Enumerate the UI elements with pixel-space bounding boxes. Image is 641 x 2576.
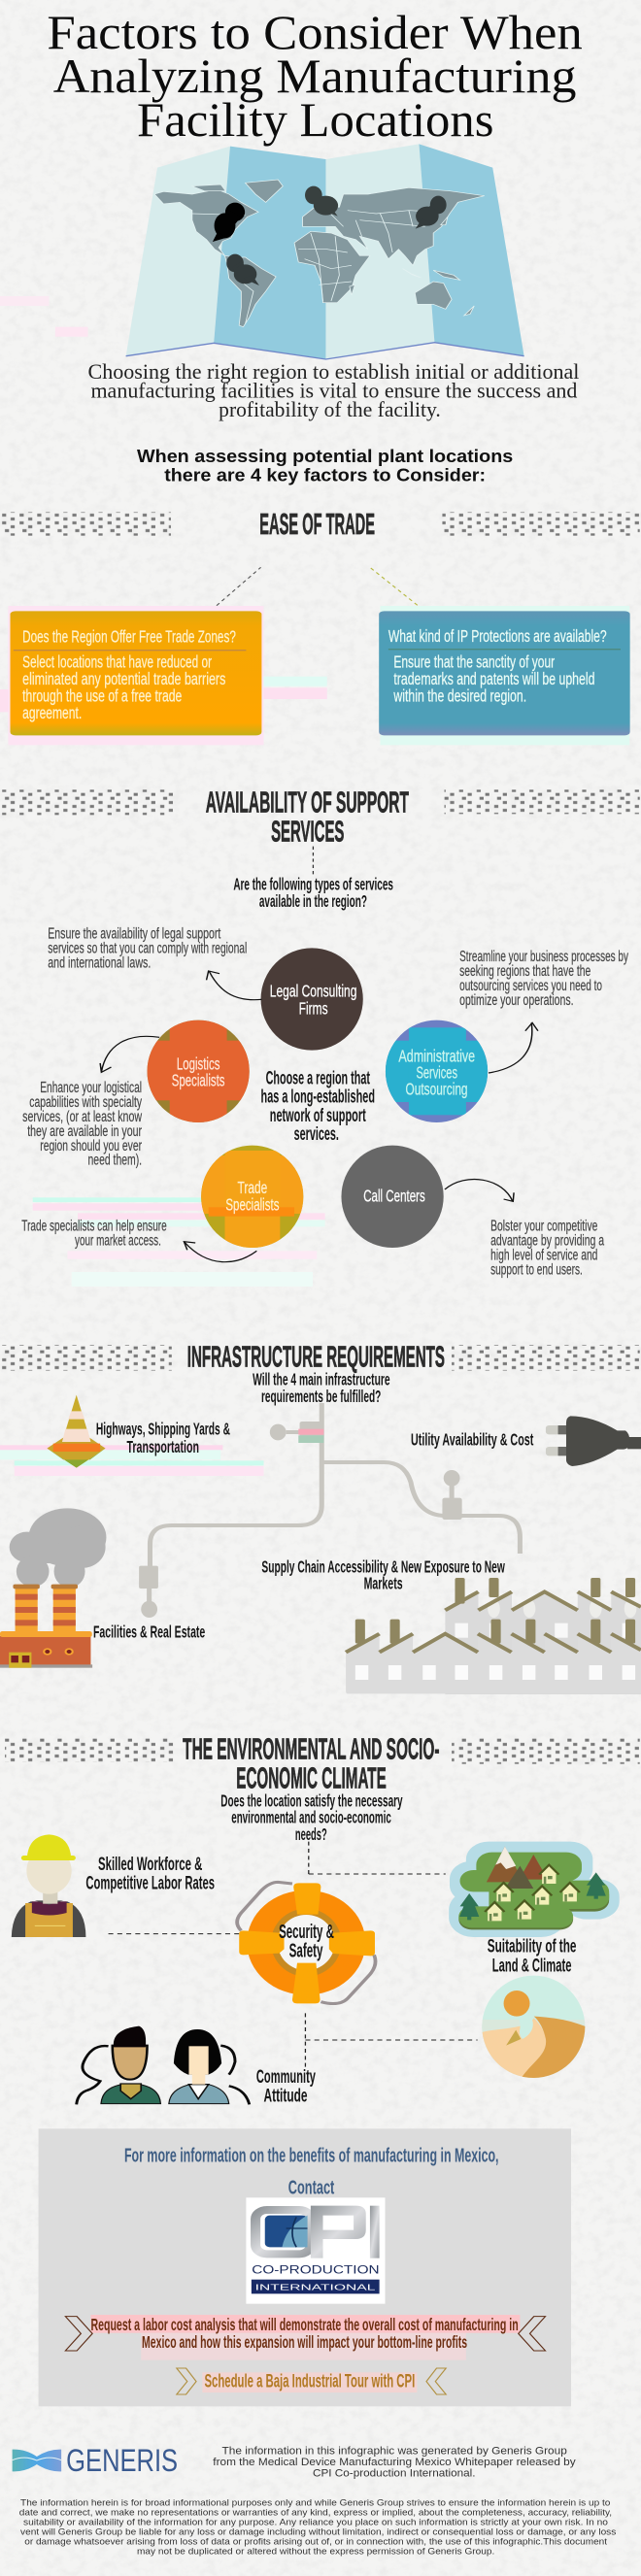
key factors statement: When assessing potential plant locations — [137, 446, 513, 466]
central statement: services. — [294, 1122, 339, 1144]
arrows from circles to notes — [100, 971, 538, 1262]
circle: logistics specialists — [148, 1020, 250, 1122]
circle: administrative services outsourcing: Services — [416, 1063, 457, 1083]
title — [47, 6, 583, 147]
label: skilled workforce: Skilled Workforce & — [98, 1853, 202, 1874]
label: security and safety — [279, 1921, 334, 1961]
world map — [126, 144, 524, 359]
circle: administrative services outsourcing: Administrative — [398, 1047, 475, 1066]
intro paragraph: profitability of the facility. — [219, 399, 441, 421]
panel: free trade zones: eliminated any potential trade barriers — [22, 669, 225, 688]
request labor cost analysis — [90, 2315, 519, 2352]
section: availability of support services: has a long-established — [261, 1086, 375, 1107]
text: legal services note: Ensure the availability of legal support — [48, 925, 220, 942]
circle: administrative services outsourcing: Outsourcing — [406, 1080, 468, 1099]
section: availability of support services — [2, 786, 640, 1278]
circle: logistics specialists: Logistics — [177, 1054, 219, 1074]
section: environmental and socio-economic climate: Community — [256, 2065, 316, 2087]
circle: logistics specialists: Specialists — [172, 1071, 225, 1090]
label: community attitude: Attitude — [263, 2085, 308, 2106]
contact heading: Contact — [288, 2176, 335, 2198]
panel: IP protections: within the desired region. — [393, 686, 526, 706]
text: legal services note: services so that you can comply with regional — [48, 940, 247, 956]
circle: administrative services outsourcing — [386, 1020, 488, 1122]
icon: life buoy — [237, 1882, 376, 2004]
text: logistics note: region should you ever — [40, 1137, 142, 1154]
icon: plug — [546, 1416, 641, 1466]
icon: push pin, Europe — [305, 186, 338, 217]
text: trade note: your market access. — [75, 1232, 161, 1249]
text: logistics note: services, (or at least know — [22, 1108, 142, 1125]
label: supply chain: Markets — [364, 1574, 403, 1593]
icon: factory row — [346, 1578, 641, 1694]
text: legal services note: and international laws. — [48, 954, 151, 971]
section: infrastructure requirements: Will the 4 main infrastructure — [253, 1371, 390, 1389]
text: logistics note: need them). — [87, 1151, 142, 1168]
logo: CPI Co-production International — [246, 2197, 386, 2304]
panel: call to action — [39, 2128, 571, 2406]
label: highways: Transportation — [126, 1437, 199, 1456]
icon: landscape island — [449, 1842, 620, 1937]
heading: environmental climate — [183, 1732, 439, 1795]
section: infrastructure requirements: Facilities & Real Estate — [93, 1623, 205, 1642]
logo: CPI Co-production International: INTERNATIONAL — [255, 2283, 375, 2292]
panel: free trade zones: Does the Region Offer Free Trade Zones? — [22, 627, 236, 647]
question: needs? — [295, 1825, 327, 1844]
text: trade note — [21, 1218, 167, 1249]
text: logistics note: Enhance your logistical — [40, 1079, 142, 1096]
panel: free trade zones: through the use of a free trade — [22, 686, 182, 706]
section: ease of trade — [2, 508, 640, 745]
text: trade note: Trade specialists can help ensure — [21, 1218, 167, 1234]
circle: call centers — [341, 1146, 444, 1248]
circle: call centers: Call Centers — [363, 1187, 425, 1206]
label: suitability of land — [488, 1935, 576, 1976]
logo: Generis: GENERIS — [66, 2443, 178, 2478]
icon: push pin, Asia — [416, 196, 447, 229]
heading: availability of support services: SERVICES — [271, 815, 344, 849]
section: environmental and socio-economic climate: Security & — [279, 1921, 334, 1942]
heading: availability of support services — [206, 786, 409, 849]
label: highways — [96, 1420, 230, 1456]
footer — [13, 2443, 616, 2557]
cable diagram — [139, 1403, 520, 1618]
section: environmental and socio-economic climate: Does the location satisfy the necessary — [220, 1792, 403, 1811]
text: legal services note — [48, 925, 247, 971]
circle: trade specialists — [201, 1146, 303, 1248]
heading: environmental climate: ECONOMIC CLIMATE — [236, 1761, 387, 1795]
icon: push pin, South America — [226, 254, 259, 285]
circle: legal consulting firms: Legal Consulting — [270, 982, 356, 1001]
source note: CPI Co-production International. — [313, 2467, 476, 2479]
question: available in the region? — [259, 892, 367, 911]
section: environmental and socio-economic climate: Competitive Labor Rates — [85, 1872, 215, 1893]
icon: sun and dunes — [481, 1976, 589, 2081]
icon: push pin, North America — [213, 203, 245, 242]
header section — [47, 6, 583, 485]
title: Facility Locations — [137, 93, 493, 147]
text: logistics note: they are available in your — [27, 1122, 142, 1140]
central statement — [261, 1067, 375, 1144]
text: logistics note — [22, 1079, 142, 1168]
intro paragraph — [87, 361, 579, 421]
disclaimer — [19, 2499, 616, 2557]
question — [220, 1792, 403, 1844]
source note: The information in this infographic was generated by Generis Group — [222, 2445, 567, 2457]
icon: factory with smoke — [0, 1508, 106, 1668]
icon: chevrons around request — [65, 2317, 546, 2351]
section: infrastructure requirements: Highways, Shipping Yards & — [96, 1420, 230, 1439]
disclaimer: may not be duplicated or altered without the express permission of Generis Group. — [137, 2548, 494, 2557]
source note: from the Medical Device Manufacturing Mexico Whitepaper released by — [213, 2456, 577, 2468]
panel: free trade zones: agreement. — [22, 703, 82, 722]
circle: trade specialists: Specialists — [225, 1195, 279, 1215]
circle: trade specialists: Trade — [238, 1178, 267, 1197]
section: environmental and socio-economic climate: environmental and socio-economic — [231, 1809, 391, 1827]
key factors statement — [137, 446, 513, 485]
panel: IP protections — [379, 611, 630, 735]
text: call centers note — [490, 1218, 604, 1278]
label: skilled workforce — [85, 1853, 215, 1893]
question — [233, 876, 393, 911]
logo: Generis — [13, 2443, 178, 2478]
section: availability of support services: Choose a region that — [266, 1067, 370, 1088]
icon: traffic cone — [47, 1395, 106, 1468]
icon: community people — [77, 2026, 250, 2104]
section: ease of trade: EASE OF TRADE — [259, 508, 375, 541]
key factors statement: there are 4 key factors to Consider: — [164, 465, 486, 485]
circle: legal consulting firms — [261, 948, 363, 1051]
icon: worker — [12, 1834, 85, 1937]
label: community attitude — [256, 2065, 316, 2106]
circle: legal consulting firms: Firms — [299, 999, 328, 1019]
section: infrastructure requirements: requirements be fulfilled? — [261, 1388, 381, 1406]
section: availability of support services: Are the following types of services — [233, 876, 393, 894]
section: environmental and socio-economic climate — [5, 1732, 640, 2106]
icon: chevrons around schedule — [177, 2368, 446, 2394]
panel: free trade zones — [11, 611, 261, 735]
section: availability of support services: network of support — [270, 1104, 366, 1125]
section: infrastructure requirements — [0, 1340, 641, 1694]
label: security and safety: Safety — [289, 1939, 323, 1961]
logo: CPI Co-production International: CO-PRODUCTION — [252, 2263, 380, 2276]
question — [253, 1371, 390, 1406]
text: logistics note: capabilities with specialty — [29, 1093, 142, 1111]
label: supply chain — [261, 1557, 505, 1593]
text: outsourcing note — [459, 948, 628, 1009]
panel: free trade zones: Select locations that have reduced or — [22, 652, 212, 672]
contact heading — [124, 2144, 499, 2198]
source note — [213, 2445, 577, 2479]
